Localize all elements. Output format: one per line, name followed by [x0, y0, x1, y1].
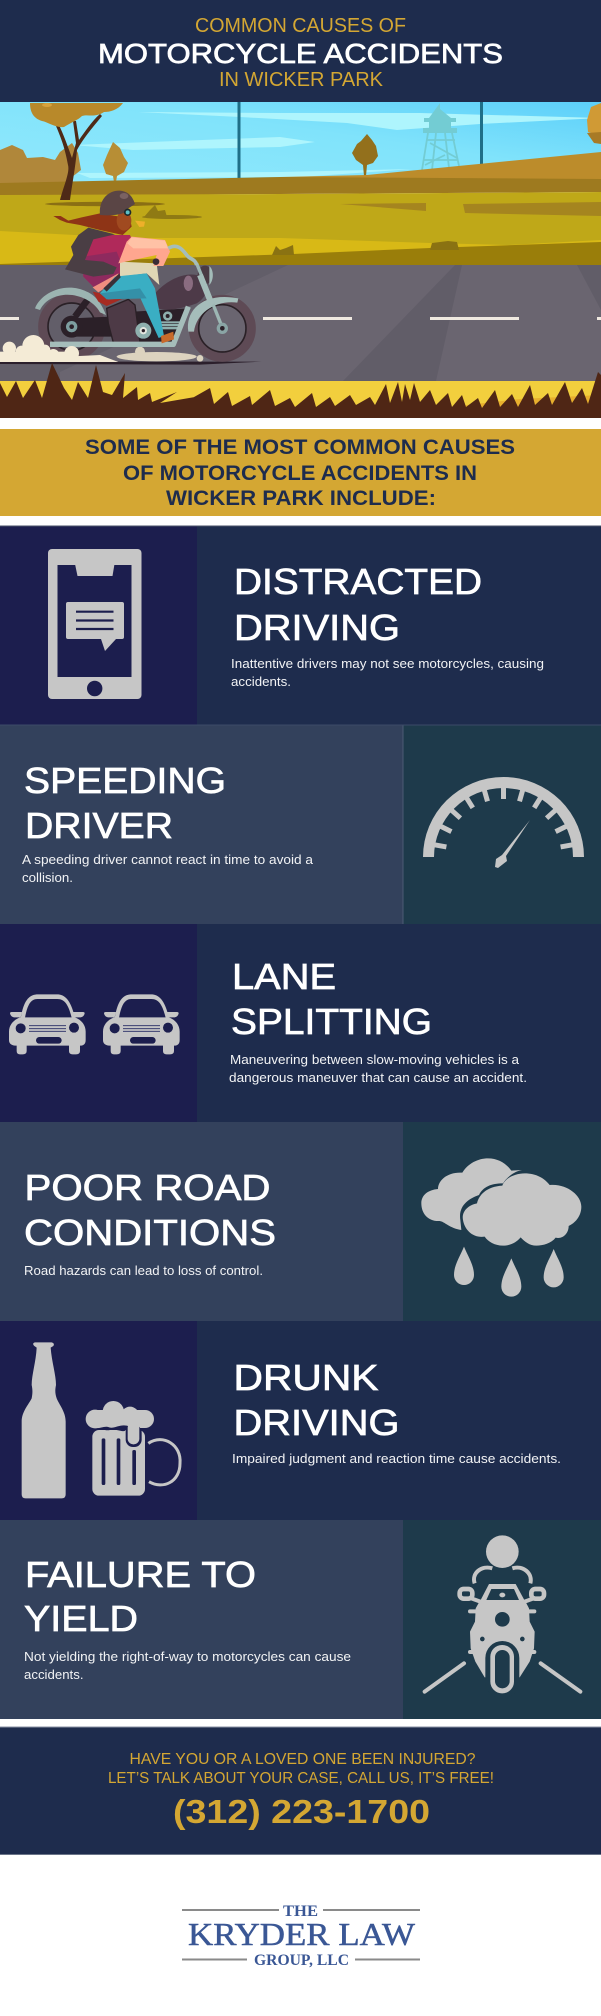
logo: The Kryder Law Group, LLC	[182, 1903, 420, 1969]
heading: speeding driver: SPEEDING	[24, 760, 226, 801]
heading: distracted driving	[234, 561, 482, 648]
panel: distracted driving	[0, 526, 601, 725]
text: failure to yield description: accidents.	[24, 1667, 84, 1682]
text: speeding driver description: collision.	[22, 870, 73, 885]
call to action panel	[0, 1726, 601, 1855]
text: distracted driving description: Inattentive drivers may not see motorcycles, causing	[231, 656, 544, 671]
panel: lane splitting	[0, 924, 601, 1122]
text: distracted driving description	[231, 656, 544, 689]
heading: failure to yield: FAILURE TO	[25, 1554, 256, 1595]
large tree	[30, 103, 123, 200]
heading: poor road conditions: CONDITIONS	[24, 1212, 276, 1253]
subheading banner: OF MOTORCYCLE ACCIDENTS IN	[123, 462, 477, 485]
call to action text: HAVE YOU OR A LOVED ONE BEEN INJURED?	[130, 1751, 476, 1768]
logo: The Kryder Law Group, LLC: KRYDER LAW	[188, 1916, 416, 1952]
right tree crown	[587, 103, 601, 144]
text: speeding driver description	[22, 852, 314, 885]
icon: beer bottle	[22, 1342, 66, 1498]
title line 3: IN WICKER PARK	[219, 69, 384, 91]
heading: poor road conditions: POOR ROAD	[24, 1167, 270, 1208]
motorcycle and rider	[0, 191, 262, 365]
panel: drunk driving	[0, 1321, 601, 1520]
icon: smartphone with message	[48, 549, 142, 699]
text: lane splitting description: Maneuvering between slow-moving vehicles is a	[230, 1052, 520, 1067]
small tree	[103, 142, 128, 182]
subheading banner: SOME OF THE MOST COMMON CAUSES	[85, 436, 515, 459]
icon: motorcycle front view	[425, 1535, 580, 1698]
logo: The Kryder Law Group, LLC: GROUP, LLC	[254, 1952, 349, 1969]
text: drunk driving description: Impaired judgment and reaction time cause accidents.	[232, 1451, 561, 1466]
text: failure to yield description	[24, 1649, 351, 1682]
heading: poor road conditions	[24, 1167, 276, 1253]
icon: beer mug	[86, 1401, 180, 1496]
panel: speeding driver	[0, 724, 601, 924]
subheading banner: WICKER PARK INCLUDE:	[166, 487, 436, 510]
icon: two cars	[9, 994, 180, 1054]
text: poor road conditions description: Road hazards can lead to loss of control.	[24, 1263, 263, 1278]
heading: drunk driving	[234, 1357, 400, 1443]
logo: The Kryder Law Group, LLC: THE	[283, 1903, 318, 1920]
distant tree	[352, 134, 378, 176]
call to action text	[108, 1751, 494, 1787]
text: speeding driver description: A speeding driver cannot react in time to avoid a	[22, 852, 314, 867]
rear wheel	[43, 298, 101, 356]
fields	[280, 152, 601, 182]
heading: speeding driver	[24, 760, 226, 846]
subheading banner	[0, 429, 601, 516]
road	[0, 265, 601, 381]
icon: speedometer	[423, 777, 584, 868]
heading: distracted driving: DRIVING	[234, 607, 400, 648]
heading: distracted driving: DISTRACTED	[234, 561, 482, 602]
tank	[155, 275, 207, 310]
header: title block	[0, 0, 601, 102]
heading: lane splitting: SPLITTING	[231, 1001, 432, 1042]
heading: lane splitting	[231, 956, 432, 1042]
front wheel	[193, 299, 251, 357]
heading: speeding driver: DRIVER	[25, 805, 173, 846]
heading: drunk driving: DRIVING	[234, 1402, 400, 1443]
text: lane splitting description	[229, 1052, 527, 1085]
text: lane splitting description: dangerous maneuver that can cause an accident.	[229, 1070, 527, 1085]
rider	[118, 262, 159, 285]
dust	[0, 335, 118, 362]
heading: failure to yield: YIELD	[24, 1598, 138, 1639]
text: distracted driving description: accidents.	[231, 674, 291, 689]
background bushes	[0, 143, 81, 186]
water tower	[422, 103, 459, 170]
hero illustration: motorcyclist on a country road	[0, 102, 601, 418]
foreground grass	[0, 363, 601, 418]
panel: poor road conditions	[0, 1122, 601, 1321]
heading: failure to yield	[24, 1554, 256, 1639]
panel: failure to yield	[0, 1520, 601, 1719]
icon: rain cloud	[421, 1158, 581, 1297]
text: failure to yield description: Not yielding the right-of-way to motorcycles can cause	[24, 1649, 351, 1664]
call to action text: LET’S TALK ABOUT YOUR CASE, CALL US, IT’S FREE!	[108, 1770, 494, 1787]
phone number: (312) 223-1700	[173, 1793, 430, 1830]
title line 1: COMMON CAUSES OF	[195, 15, 406, 37]
heading: lane splitting: LANE	[232, 956, 336, 997]
heading: drunk driving: DRUNK	[234, 1357, 378, 1398]
title line 2: MOTORCYCLE ACCIDENTS	[98, 38, 503, 69]
